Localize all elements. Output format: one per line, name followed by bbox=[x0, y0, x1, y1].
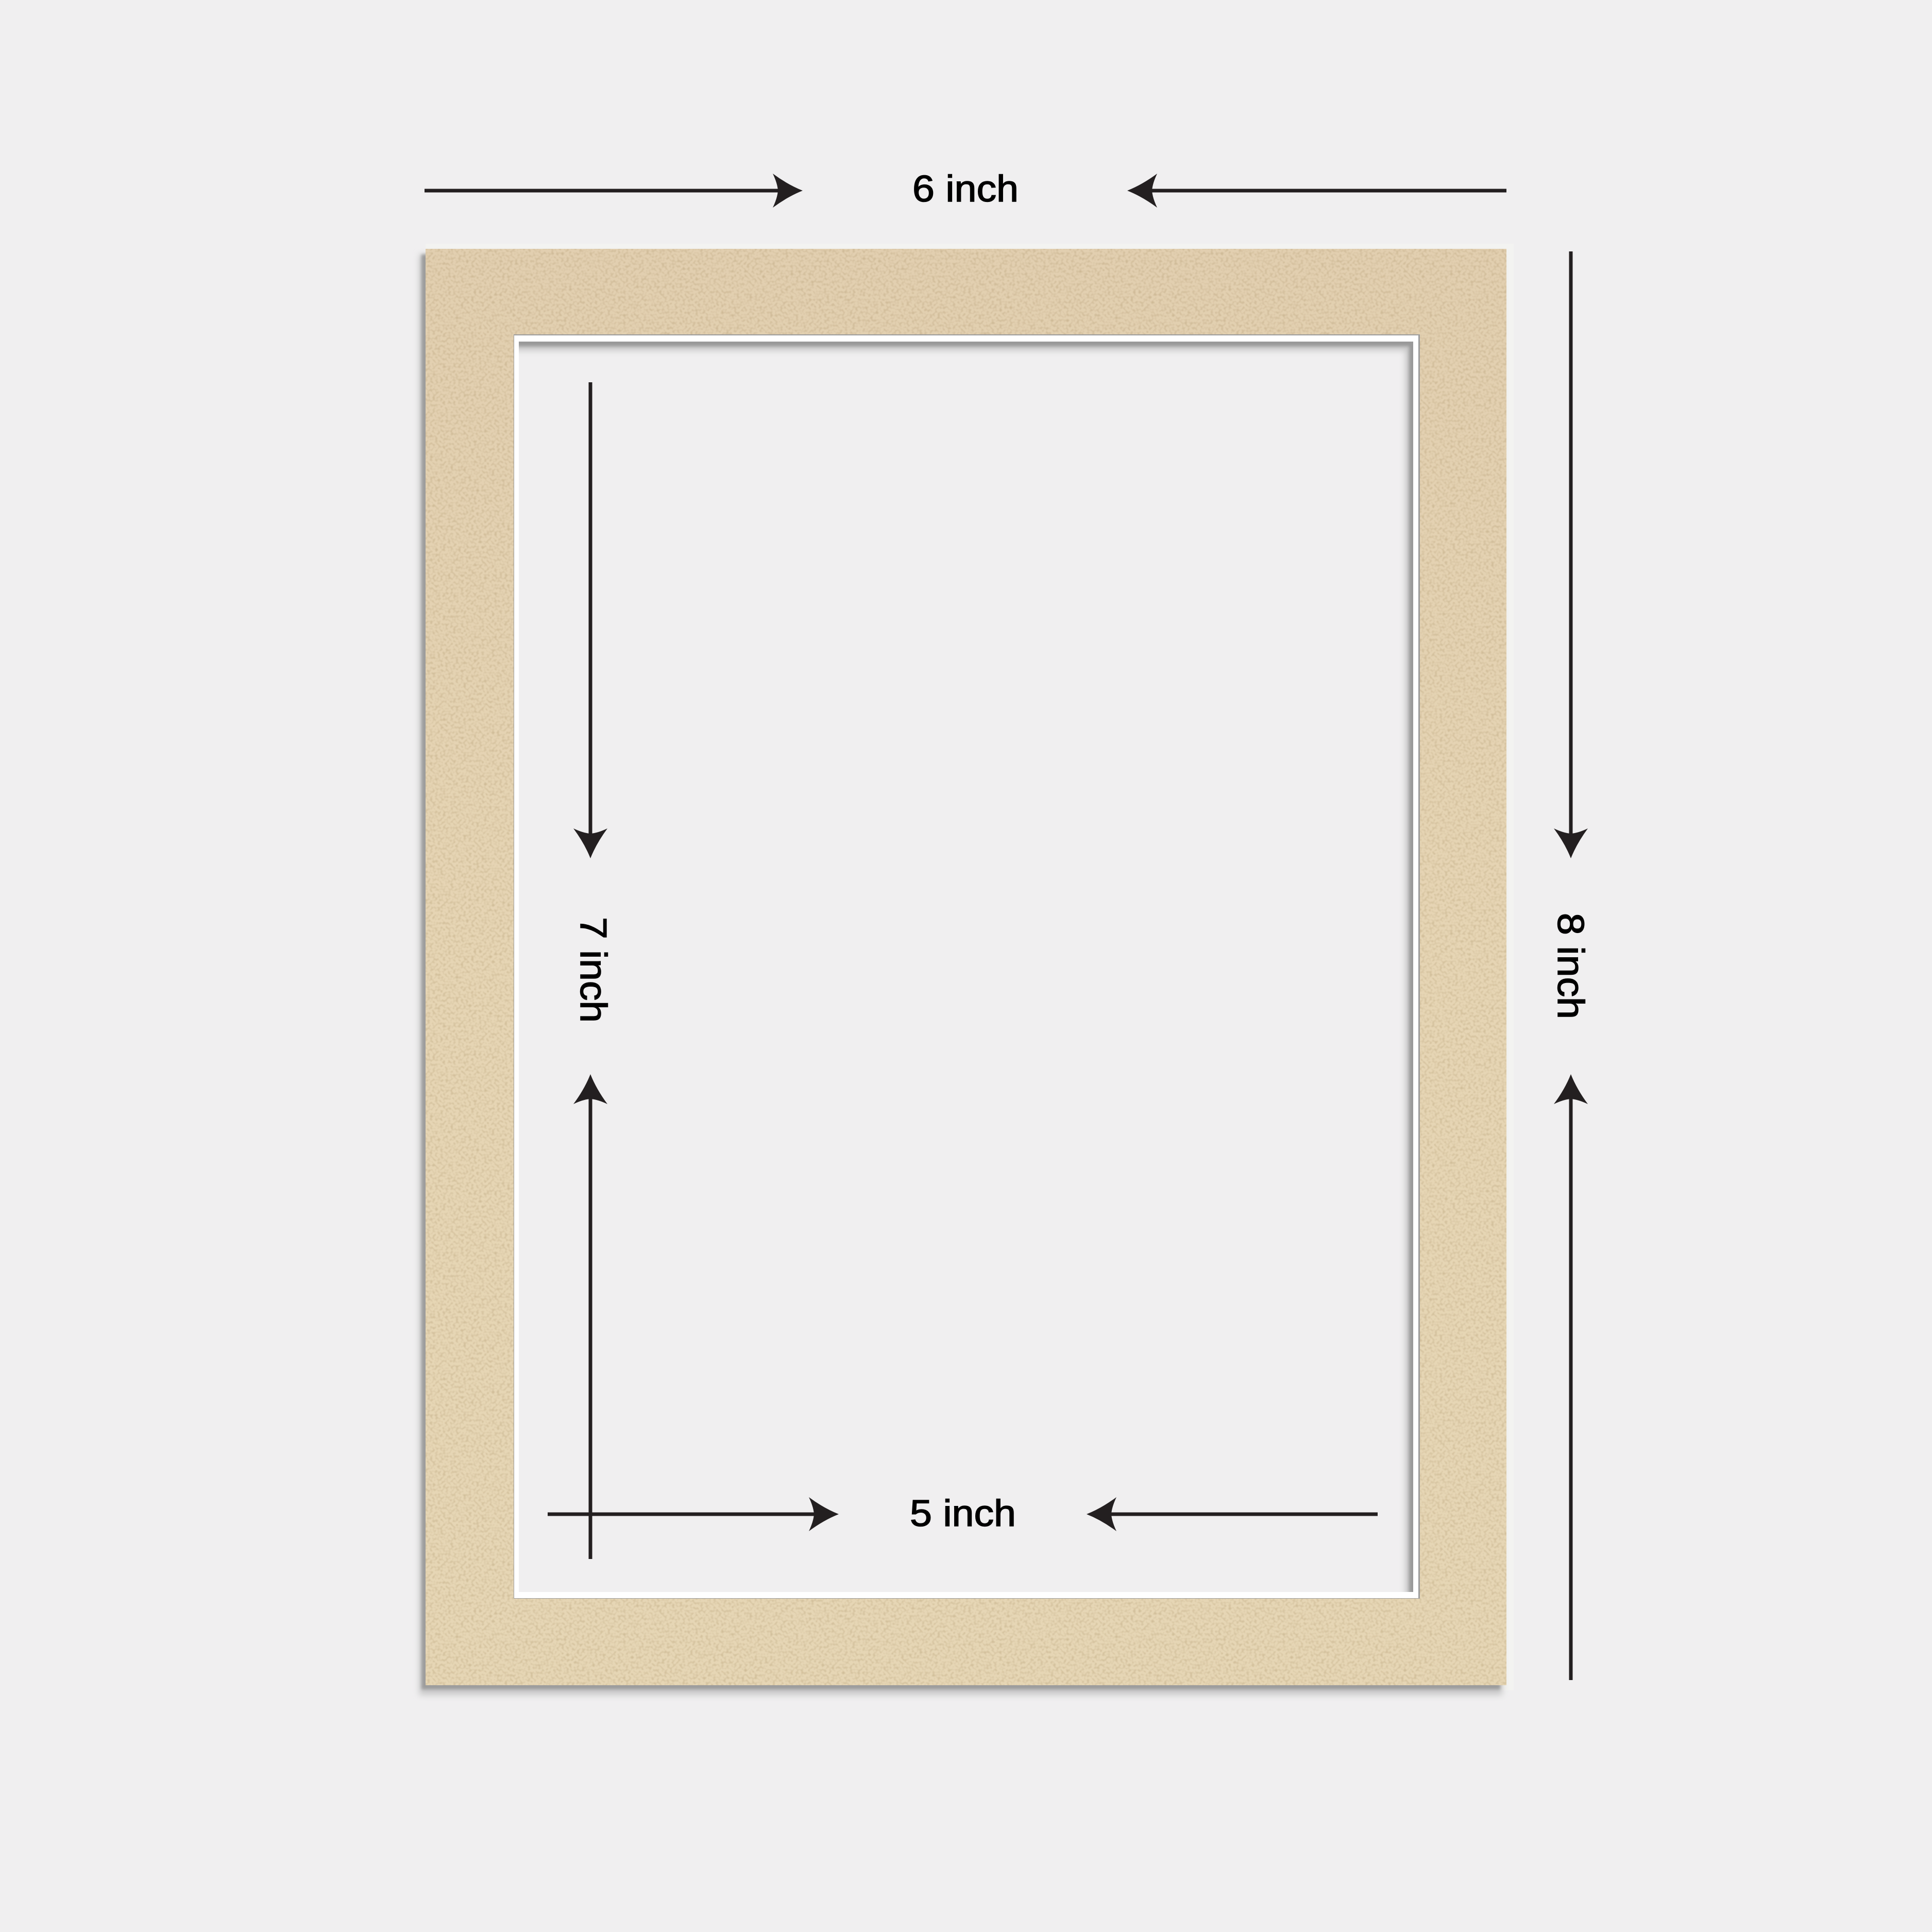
frame outer shadow bbox=[419, 255, 1502, 1695]
white bevel bbox=[514, 335, 1418, 1598]
arrow: 8 inch height, top bbox=[1554, 251, 1588, 858]
arrow: 8 inch height, bottom bbox=[1554, 1074, 1588, 1680]
window opening with inner shadow bbox=[519, 345, 1410, 1592]
mat board bbox=[426, 249, 1506, 1685]
label: 6 inch: 6 inch bbox=[912, 168, 1019, 210]
arrow: 5 inch width, right bbox=[1087, 1497, 1378, 1531]
label: 8 inch: 8 inch bbox=[1550, 913, 1591, 1019]
arrow: 7 inch height, top bbox=[573, 382, 607, 858]
arrow: 5 inch width, left bbox=[548, 1497, 839, 1531]
frame highlight halo bbox=[426, 244, 1514, 1690]
arrow: 7 inch height, bottom bbox=[573, 1074, 607, 1559]
label: 7 inch: 7 inch bbox=[572, 917, 614, 1023]
panel: mat frame bbox=[419, 244, 1514, 1695]
arrow: 6 inch width, right bbox=[1127, 174, 1506, 208]
label: 5 inch: 5 inch bbox=[910, 1493, 1016, 1534]
arrow: 6 inch width, left bbox=[425, 174, 803, 208]
